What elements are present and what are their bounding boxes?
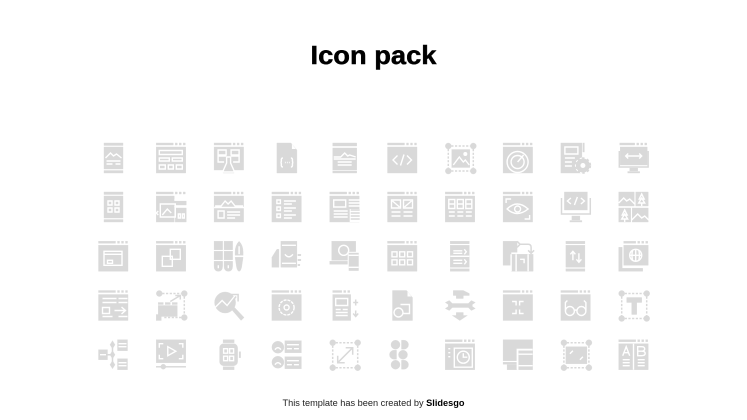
icon: selected image [445, 143, 476, 174]
icon: devices with settings [330, 241, 359, 271]
icon: document with sort controls [333, 290, 358, 320]
icon: document with gear [561, 143, 590, 173]
icon: web letters A B [619, 340, 648, 370]
icon: web list [272, 192, 301, 222]
icon: video player [156, 340, 186, 369]
icon: file with shapes [392, 290, 412, 320]
icon: user profile cards [272, 341, 301, 369]
icon: web glasses [561, 290, 590, 320]
title: Icon pack [310, 40, 437, 70]
icon: phone with form rows [450, 241, 469, 271]
footer credit: This template has been created by Slidesgo [282, 398, 465, 408]
icon: web article with image [214, 192, 244, 222]
icon: web fullscreen [503, 290, 533, 320]
icon: web settings gear [272, 290, 301, 320]
icon: web article columns [330, 192, 360, 222]
icon: phone with grid [104, 192, 123, 222]
icon: tablet with landscape [333, 143, 357, 173]
icon: web globe [619, 241, 648, 271]
icon: wrench with arrows [445, 290, 475, 320]
icon: web eye [503, 192, 533, 222]
icon: web content transfer [98, 290, 128, 320]
icon: monitor with width arrow [619, 143, 648, 173]
icon: smartwatch [220, 340, 241, 370]
icon: pills and dots [390, 340, 408, 369]
icon: web dashboard clock [445, 340, 475, 370]
icon: flow diagram [98, 340, 128, 370]
icon: monitor with code [562, 192, 590, 222]
icon: phone with up and down arrows [566, 241, 585, 271]
icon: web copy windows [156, 241, 186, 271]
icon: web window in window [98, 241, 128, 271]
icon: colour swatches and brush [214, 241, 243, 271]
icon: image selection [561, 340, 592, 371]
icon: resize selection [330, 340, 361, 371]
icon: monitor and tablet [503, 340, 533, 370]
icon: phone with landscape [104, 143, 123, 173]
icon: web image cards [388, 192, 417, 222]
icon: web code [388, 143, 417, 173]
icon: phone rotation [503, 241, 534, 271]
icon: magnifier with chart [215, 292, 244, 320]
icon: web gauge [503, 143, 533, 173]
icon grid [98, 143, 650, 371]
icon: web app grid [388, 241, 417, 271]
icon: image and tree tiles [619, 192, 649, 222]
icon: web layout blocks [156, 143, 186, 173]
icon: code file [277, 143, 297, 173]
icon: text selection [619, 290, 650, 322]
icon: scale selection [156, 290, 187, 320]
icon: hand holding phone [272, 241, 301, 267]
icon: web image gallery [156, 192, 186, 222]
icon: web science flask [214, 143, 244, 173]
icon: web table [445, 192, 475, 222]
